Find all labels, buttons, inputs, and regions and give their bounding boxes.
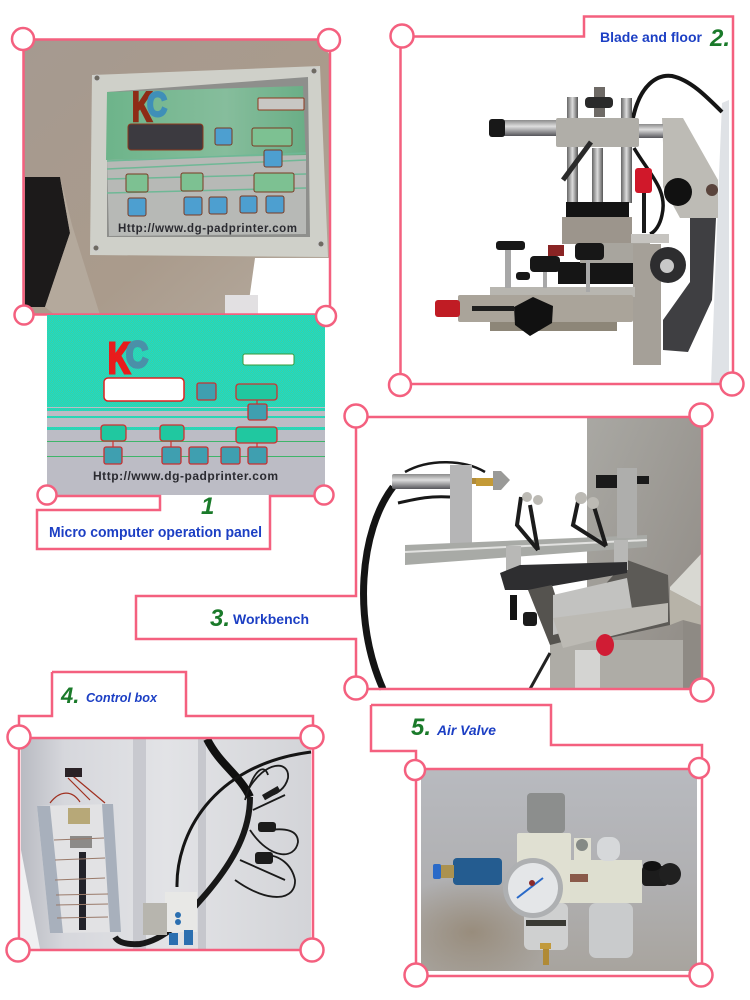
black linkages bbox=[517, 497, 606, 550]
black base block bbox=[558, 262, 647, 284]
diagram url: Http://www.dg-padprinter.com bbox=[93, 469, 278, 483]
label window bbox=[258, 98, 304, 110]
number 3.: 3. bbox=[210, 605, 230, 632]
thick cable bbox=[207, 739, 250, 797]
symbol boxes bbox=[126, 128, 294, 192]
right bowl bbox=[589, 903, 633, 958]
black plate bbox=[500, 562, 627, 590]
silver slide box bbox=[553, 578, 633, 635]
display window bbox=[128, 124, 203, 150]
regulator knob bbox=[527, 793, 565, 833]
number 5.: 5. bbox=[411, 714, 431, 741]
small knobs bbox=[496, 241, 604, 280]
horizontal rods bbox=[495, 120, 557, 136]
keypad buttons bbox=[128, 128, 284, 216]
label: Micro computer operation panel bbox=[49, 525, 262, 541]
display box bbox=[104, 378, 184, 401]
knob bbox=[664, 178, 692, 206]
label: Workbench: Workbench bbox=[233, 612, 309, 627]
number 2.: 2. bbox=[709, 25, 730, 52]
cable loops bbox=[235, 766, 298, 897]
cabinet edge bbox=[670, 553, 702, 607]
brass drain bbox=[540, 943, 551, 949]
frame 5 with tab bbox=[371, 705, 702, 976]
regulator body bbox=[517, 833, 571, 903]
red knob bbox=[635, 168, 652, 193]
vertical plate bbox=[633, 244, 661, 365]
black elbow bbox=[642, 866, 668, 886]
label: Air Valve: Air Valve bbox=[436, 722, 496, 738]
white column bbox=[711, 100, 729, 385]
brackets front bbox=[506, 546, 521, 576]
frame 1 bbox=[24, 40, 330, 314]
red tag bbox=[570, 874, 588, 882]
corner circles bbox=[6, 726, 324, 962]
right bracket bbox=[617, 468, 637, 538]
cable bbox=[633, 76, 722, 118]
wiring harness bbox=[115, 797, 250, 944]
bracket bbox=[662, 118, 718, 218]
upright posts bbox=[567, 97, 578, 203]
terminal board bbox=[37, 804, 121, 933]
label box bbox=[243, 354, 294, 365]
frame 3 with label notch bbox=[136, 417, 702, 689]
keypad logo: C bbox=[147, 86, 167, 124]
symbol boxes bbox=[101, 384, 277, 443]
panel 3: workbench bbox=[136, 404, 714, 702]
dark arm bbox=[663, 218, 716, 352]
photo: control box interior bbox=[21, 739, 311, 949]
panel 1b: keypad diagram bbox=[47, 315, 325, 495]
diagram background bbox=[47, 315, 325, 495]
number 1: 1 bbox=[201, 493, 214, 520]
frame 2 bbox=[400, 16, 733, 384]
mounting screw bbox=[576, 839, 588, 851]
support bbox=[450, 465, 472, 548]
corner circles bbox=[389, 24, 744, 396]
pneumatic cylinder bbox=[392, 474, 452, 489]
valve block bbox=[165, 892, 197, 932]
photo: control panel on machine bbox=[24, 40, 330, 315]
corner circles bbox=[344, 404, 714, 702]
star knob bbox=[514, 297, 553, 336]
arc cable bbox=[177, 752, 311, 887]
keypad logo: K bbox=[132, 83, 152, 130]
callout frame bbox=[37, 496, 325, 549]
diagram logo: K bbox=[108, 334, 130, 383]
panel 2: blade and floor bbox=[389, 16, 744, 396]
main cable bbox=[364, 487, 393, 689]
label: Control box: Control box bbox=[86, 690, 158, 705]
corner circles panel 1 bbox=[12, 28, 340, 504]
red knob bbox=[596, 634, 614, 656]
panel 4: control box bbox=[6, 672, 324, 962]
lever bbox=[563, 142, 591, 180]
middle block bbox=[566, 202, 629, 218]
photo: workbench mechanism bbox=[364, 418, 702, 689]
corner circles bbox=[404, 758, 712, 986]
slide bars bbox=[490, 287, 635, 297]
wires top bbox=[50, 772, 105, 803]
dark floor bbox=[600, 560, 670, 640]
buttons bbox=[104, 383, 267, 464]
machine wall bbox=[587, 418, 702, 689]
rail bbox=[405, 535, 647, 565]
blue filter bbox=[453, 858, 502, 885]
photo: blade and floor mechanism bbox=[435, 76, 729, 385]
red end knob bbox=[435, 300, 460, 317]
panel 5: air valve bbox=[371, 705, 712, 986]
wheel bbox=[650, 247, 686, 283]
top knob bbox=[594, 87, 605, 117]
photo: air valve assembly bbox=[421, 770, 697, 971]
callout 1: Micro computer operation panel bbox=[37, 493, 325, 549]
frame 4 with tab bbox=[19, 672, 313, 950]
panel 1: operation panel photo bbox=[24, 40, 330, 315]
panel url: Http://www.dg-padprinter.com bbox=[118, 223, 297, 235]
diagram logo: C bbox=[126, 334, 148, 375]
left bowl bbox=[524, 903, 568, 950]
sight dome bbox=[597, 837, 620, 861]
pressure gauge bbox=[503, 858, 563, 918]
number 4.: 4. bbox=[60, 683, 79, 708]
right lubricator body bbox=[570, 860, 642, 903]
clamp block bbox=[556, 118, 639, 147]
connector lines bbox=[113, 400, 257, 447]
screws bbox=[93, 68, 324, 251]
label: Blade and floor: Blade and floor bbox=[600, 30, 703, 45]
